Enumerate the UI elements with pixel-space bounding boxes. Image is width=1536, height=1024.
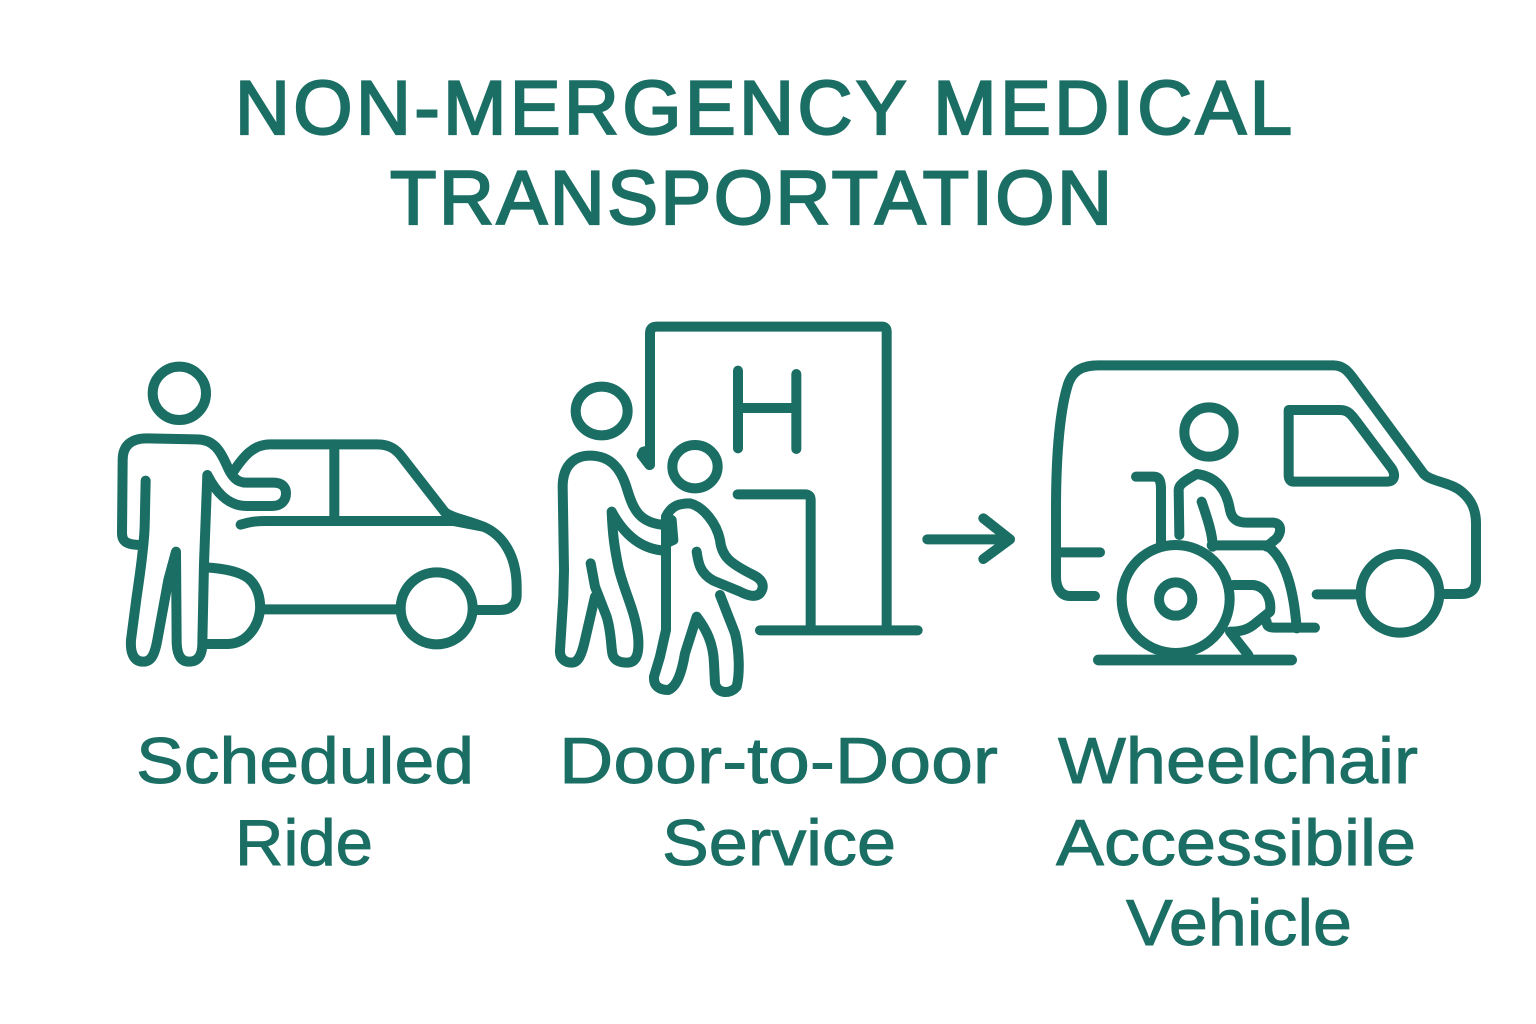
panel: door-to-door service <box>559 327 1010 879</box>
title <box>235 66 1292 241</box>
icon: helper with patient at hospital door <box>560 327 1010 692</box>
label: scheduled ride <box>136 724 474 879</box>
label: door-to-door service <box>559 724 998 879</box>
panel: wheelchair accessible vehicle <box>1056 365 1476 959</box>
label: wheelchair accessible vehicle: Accessibile <box>1056 806 1416 879</box>
icon: person beside car <box>122 367 517 662</box>
label: scheduled ride: Scheduled <box>136 724 474 797</box>
label: door-to-door service: Door-to-Door <box>559 724 998 797</box>
label: door-to-door service: Service <box>662 806 896 879</box>
label: wheelchair accessible vehicle: Vehicle <box>1126 886 1352 959</box>
icon: wheelchair user in van <box>1056 365 1476 660</box>
panel: scheduled ride <box>122 367 517 879</box>
label: wheelchair accessible vehicle <box>1056 724 1418 959</box>
title: TRANSPORTATION <box>390 156 1112 241</box>
title: NON-MERGENCY MEDICAL <box>235 66 1292 151</box>
label: wheelchair accessible vehicle: Wheelchair <box>1058 724 1418 797</box>
label: scheduled ride: Ride <box>235 806 373 879</box>
